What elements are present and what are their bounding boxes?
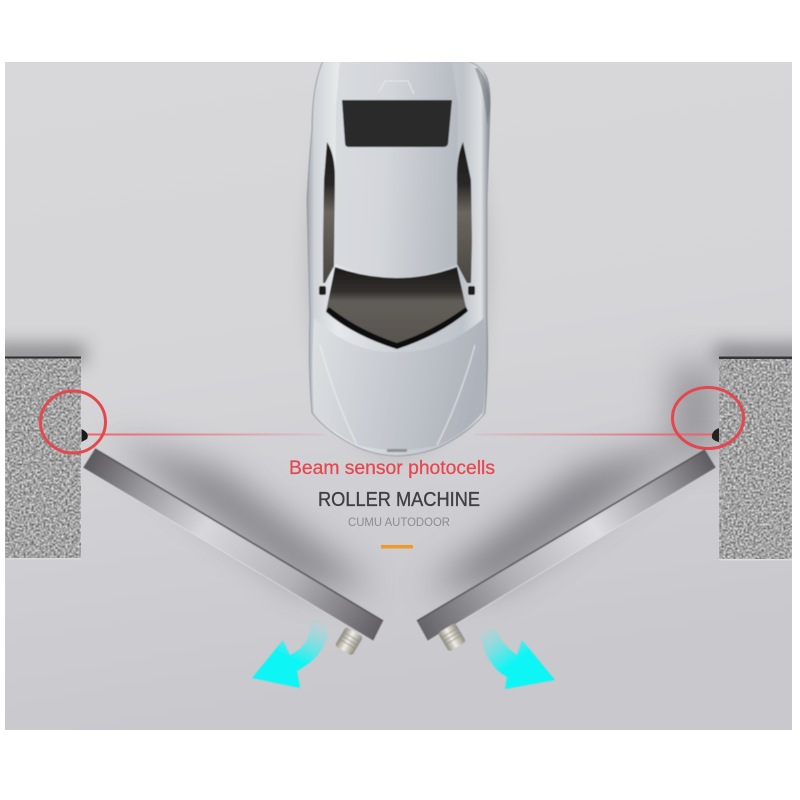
car rear right shoulder shading bbox=[475, 68, 490, 125]
left mirror bbox=[319, 286, 326, 295]
left side window bbox=[323, 142, 335, 283]
right mirror bbox=[468, 286, 475, 295]
car rear badge outline bbox=[379, 81, 414, 94]
right side window bbox=[457, 142, 472, 283]
windshield lower band bbox=[326, 307, 468, 349]
car hood bbox=[312, 318, 485, 450]
heading: roller machine: ROLLER MACHINE bbox=[318, 489, 480, 511]
right arm bbox=[417, 450, 716, 641]
car body bbox=[307, 61, 490, 456]
subheading: cumu autodoor: CUMU AUTODOOR bbox=[348, 517, 450, 529]
car rear window bbox=[342, 100, 452, 147]
right beam bbox=[475, 434, 715, 436]
left arm bbox=[83, 449, 383, 641]
left photocell sensor bbox=[82, 429, 88, 442]
left connector bbox=[335, 627, 363, 656]
right cyan arrow bbox=[480, 628, 555, 689]
right red circle bbox=[672, 388, 744, 448]
right photocell sensor bbox=[712, 428, 719, 442]
hood crease lines bbox=[320, 345, 475, 445]
car windshield bbox=[326, 267, 467, 349]
orange accent bar bbox=[381, 545, 413, 548]
right connector bbox=[438, 623, 466, 652]
shadows on floor bbox=[0, 66, 800, 590]
car bbox=[307, 61, 490, 456]
left concrete block bbox=[5, 356, 81, 560]
left red circle bbox=[40, 391, 106, 453]
right concrete block bbox=[719, 356, 792, 560]
front grille bbox=[387, 449, 407, 452]
left cyan arrow bbox=[252, 620, 328, 688]
caption: beam sensor photocells: Beam sensor photocells bbox=[289, 458, 495, 479]
left beam bbox=[85, 434, 325, 436]
car roof bbox=[335, 62, 458, 277]
